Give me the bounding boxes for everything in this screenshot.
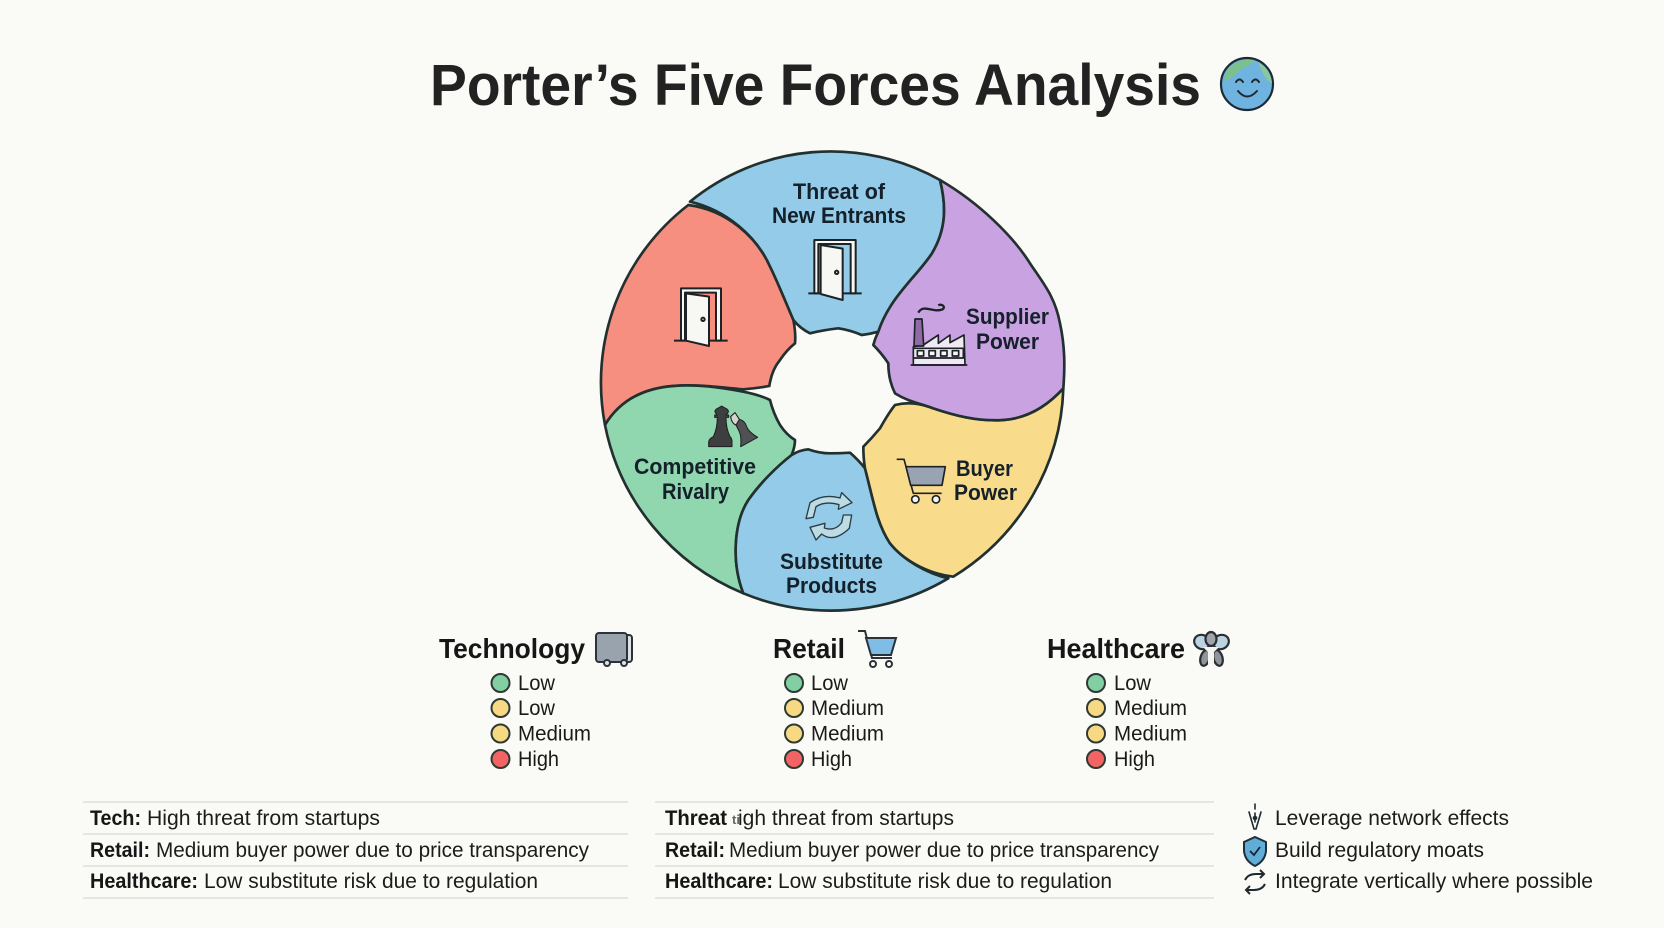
panel: technology ratings: Low (518, 696, 555, 720)
label: substitute products: Substitute (780, 549, 883, 574)
segment: red unlabeled force (601, 205, 795, 425)
row: retail: Medium buyer power due to price transparency (729, 839, 1159, 862)
panel: healthcare ratings: Medium (1114, 722, 1187, 746)
panel: healthcare ratings: High (1114, 747, 1155, 771)
panel: strategy list: Integrate vertically where possible (1275, 870, 1593, 893)
panel: healthcare ratings: Low (1114, 671, 1151, 695)
title: Porter’s Five Forces Analysis (430, 53, 1201, 118)
heading: retail: Retail (773, 633, 845, 664)
row: retail: Retail: (90, 839, 150, 862)
label: threat of new entrants: New Entrants (772, 203, 906, 228)
rating list: healthcare (1087, 674, 1105, 768)
icon: monitor (596, 633, 632, 666)
label: buyer power (954, 456, 1017, 505)
icon: refresh arrows (1245, 870, 1265, 894)
five forces wheel (601, 151, 1064, 611)
panel: healthcare ratings (1047, 632, 1231, 771)
row: retail: Medium buyer power due to price transparency (156, 839, 589, 862)
panel: retail ratings: Low (811, 671, 848, 695)
row: threat: igh threat from startups (738, 807, 954, 830)
row: threat: ti (732, 812, 740, 827)
panel: retail ratings (773, 631, 896, 771)
row: tech: Tech: (90, 807, 141, 830)
icon: healthcare emblem (1192, 632, 1231, 667)
segment: substitute products (736, 449, 948, 611)
row: healthcare: Low substitute risk due to regulation (204, 870, 538, 893)
label: substitute products (780, 549, 883, 598)
icon: smiling globe (1221, 58, 1273, 110)
label: buyer power: Power (954, 480, 1017, 505)
segment: supplier power (873, 180, 1064, 420)
label: competitive rivalry: Competitive (634, 454, 756, 479)
rating list: technology (492, 674, 510, 768)
label: supplier power: Power (976, 329, 1039, 354)
segment: new entrants (690, 151, 944, 335)
panel: technology ratings: Medium (518, 722, 591, 746)
label: supplier power: Supplier (966, 304, 1049, 329)
label: threat of new entrants: Threat of (793, 179, 885, 204)
label: threat of new entrants (772, 179, 906, 228)
icon: network funnel (1249, 804, 1261, 829)
icon: substitute arrows (806, 493, 852, 540)
segment: buyer power (863, 388, 1063, 577)
panel: retail ratings: Medium (811, 696, 884, 720)
panel: technology ratings: High (518, 747, 559, 771)
row: retail: Retail: (665, 839, 725, 862)
panel: left insights table (83, 802, 628, 898)
row: tech: High threat from startups (147, 807, 380, 830)
icon: door left (674, 288, 728, 346)
heading: technology: Technology (439, 633, 585, 664)
rating list: retail (785, 674, 803, 768)
panel: healthcare ratings: Medium (1114, 696, 1187, 720)
icon: door top (808, 240, 862, 300)
icon: factory (911, 305, 967, 365)
panel: technology ratings (439, 633, 632, 771)
label: substitute products: Products (786, 573, 877, 598)
panel: strategy list (1244, 804, 1593, 894)
panel: right insights table (655, 802, 1214, 898)
row: healthcare: Healthcare: (90, 870, 198, 893)
label: competitive rivalry: Rivalry (662, 479, 729, 504)
label: buyer power: Buyer (956, 456, 1013, 481)
panel: retail ratings: High (811, 747, 852, 771)
icon: chess pieces (709, 406, 758, 447)
panel: retail ratings: Medium (811, 722, 884, 746)
icon: shield (1244, 837, 1266, 866)
heading: healthcare: Healthcare (1047, 633, 1185, 664)
row: threat: Threat (665, 807, 727, 830)
panel: strategy list: Build regulatory moats (1275, 839, 1484, 862)
panel: strategy list: Leverage network effects (1275, 807, 1509, 830)
row: healthcare: Healthcare: (665, 870, 773, 893)
label: supplier power (966, 304, 1049, 354)
icon: shopping cart (897, 459, 945, 503)
panel: technology ratings: Low (518, 671, 555, 695)
row: healthcare: Low substitute risk due to regulation (778, 870, 1112, 893)
label: competitive rivalry (634, 454, 756, 504)
icon: retail cart (858, 631, 896, 667)
segment: competitive rivalry (605, 385, 795, 593)
